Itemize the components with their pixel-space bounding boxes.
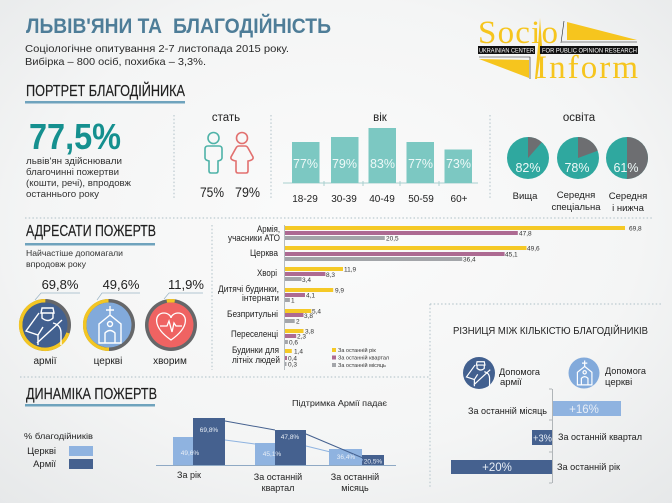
panel: age bar chart: 30-39 xyxy=(331,194,357,205)
panel: age bar chart: вік xyxy=(373,112,388,124)
bar values: 8,3 xyxy=(326,272,335,279)
title: ЛЬВІВ'ЯНИ ТА xyxy=(26,15,162,38)
title xyxy=(26,14,331,38)
bar values: 4,1 xyxy=(306,292,315,300)
recipient: army xyxy=(14,277,80,367)
bar values: 47,8 xyxy=(519,230,532,238)
dynamics legend xyxy=(24,431,94,470)
stat: 77,5%: 77,5% xyxy=(29,116,121,157)
pie: specialised xyxy=(557,137,599,179)
label: army help xyxy=(499,367,541,388)
education labels xyxy=(513,190,647,214)
dynamics legend: Армії xyxy=(33,459,56,470)
chart: dynamics columns: 45,1% xyxy=(263,451,281,458)
recipient: church: 49,6% xyxy=(103,277,140,292)
chart: donation recipients bars xyxy=(218,224,642,370)
recipients note: Найчастіше допомагали xyxy=(26,248,123,258)
heading: dynamics: ДИНАМІКА ПОЖЕРТВ xyxy=(26,386,157,403)
icon: male xyxy=(205,132,222,173)
chart: difference bars: За останній квартал xyxy=(558,432,642,443)
subtitle: Вибірка – 800 осіб, похибка – 3,3%. xyxy=(25,56,206,68)
panel: age bar chart: 77% xyxy=(408,157,433,171)
panel: education pies: освіта xyxy=(563,112,596,124)
recipient: army: армії xyxy=(34,356,57,367)
pie: specialised: 78% xyxy=(564,161,590,175)
chart: difference bars: +16% xyxy=(569,404,599,416)
education labels: і нижча xyxy=(612,203,645,214)
recipients note: впродовж року xyxy=(26,259,87,269)
category labels: Армія, xyxy=(257,224,280,235)
subtitle: Соціологічне опитування 2-7 листопада 2015 року. xyxy=(25,43,289,55)
logo: Socio Inform: Socio xyxy=(478,15,558,51)
logo: Socio Inform: Inform xyxy=(536,50,638,86)
legend: За останній місяць xyxy=(338,362,386,369)
bars: last year xyxy=(285,226,625,353)
pie: higher xyxy=(507,137,549,179)
label: church help xyxy=(605,366,647,388)
heading: recipients xyxy=(25,223,156,246)
bar values: 5,4 xyxy=(312,308,321,316)
panel: age bar chart xyxy=(283,112,478,205)
chart: dynamics columns: квартал xyxy=(262,483,294,493)
chart: dynamics columns: 47,8% xyxy=(281,434,299,441)
stat description: львів'ян здійснювали xyxy=(26,156,122,166)
chart: difference bars: +3% xyxy=(533,432,552,444)
stat description: останнього року xyxy=(26,189,100,199)
bar values: 11,9 xyxy=(344,266,357,274)
dynamics legend: Церкві xyxy=(27,446,56,457)
pie: secondary xyxy=(606,137,648,179)
bars: last quarter xyxy=(285,231,518,360)
category labels: учасники АТО xyxy=(228,233,280,244)
category labels: інтернати xyxy=(242,293,279,304)
panel: age bar chart: 83% xyxy=(370,157,395,171)
bar values xyxy=(288,226,642,368)
stat description: благочинні пожертви xyxy=(26,167,119,177)
recipient: church xyxy=(83,277,140,367)
category labels: Дитячі будинки, xyxy=(218,284,279,295)
legend xyxy=(332,347,389,369)
heading: portrait: ПОРТРЕТ БЛАГОДІЙНИКА xyxy=(26,81,185,100)
bar values: 0,4 xyxy=(288,356,297,362)
label: army help: Допомога xyxy=(499,367,541,378)
bar values: 9,9 xyxy=(335,288,344,294)
bar values: 2,3 xyxy=(297,334,306,340)
bar values: 49,6 xyxy=(527,246,540,252)
panel: gender xyxy=(200,112,260,200)
recipients note xyxy=(26,248,123,269)
title: БЛАГОДІЙНІСТЬ xyxy=(173,14,331,38)
category labels: Безпритульні xyxy=(227,309,278,320)
gender values: 75% xyxy=(200,185,224,200)
panel: age bar chart: 60+ xyxy=(451,194,468,205)
recipient: sick: 11,9% xyxy=(168,277,204,292)
recipient: sick: хворим xyxy=(153,356,187,367)
education labels: спеціальна xyxy=(551,202,601,213)
bar values: 0,6 xyxy=(289,340,298,346)
heading: recipients: АДРЕСАТИ ПОЖЕРТВ xyxy=(26,223,156,240)
education labels: Середня xyxy=(609,191,647,202)
category labels: Будинки для xyxy=(232,345,279,356)
legend: За останній квартал xyxy=(338,354,389,362)
chart: difference bars: +20% xyxy=(482,462,512,474)
subtitle xyxy=(25,43,289,68)
label: church help: церкві xyxy=(605,377,632,388)
logo: Socio Inform xyxy=(478,15,638,86)
bar values: 1 xyxy=(291,298,295,304)
gender values: 79% xyxy=(235,185,260,200)
chart: dynamics columns: 49,6% xyxy=(181,450,199,457)
gender values xyxy=(200,185,260,200)
recipient: church: церкві xyxy=(94,356,122,367)
bar values: 3,4 xyxy=(302,277,311,284)
panel: age bar chart: 79% xyxy=(332,157,357,171)
icon: female xyxy=(231,132,253,173)
chart: dynamics columns: За рік xyxy=(177,470,201,480)
category labels xyxy=(218,224,280,366)
dynamics note: Підтримка Армії падає xyxy=(292,398,388,408)
bar values: 1,4 xyxy=(294,348,303,356)
chart: dynamics columns: місяць xyxy=(341,483,369,493)
chart: dynamics columns: 20,5% xyxy=(364,458,382,466)
chart: dynamics columns: За останній xyxy=(331,472,379,482)
bar values: 36,4 xyxy=(463,256,476,264)
bar values: 45,1 xyxy=(505,252,518,258)
panel: age bar chart: 77% xyxy=(293,157,318,171)
panel: gender: стать xyxy=(212,112,240,124)
bar values: 2 xyxy=(296,318,300,326)
icon: church xyxy=(568,358,600,388)
panel: age bar chart: 50-59 xyxy=(408,194,434,205)
chart: dynamics columns: 69,8% xyxy=(200,427,218,434)
category labels: Хворі xyxy=(257,268,277,279)
pie: higher: 82% xyxy=(515,161,541,175)
panel: education pies xyxy=(507,112,648,214)
bar values: 3,8 xyxy=(305,328,314,336)
panel: age bar chart: 40-49 xyxy=(369,194,395,205)
category labels: літніх людей xyxy=(232,355,280,366)
label: army help: армії xyxy=(500,377,522,388)
bars: last month xyxy=(285,236,462,366)
chart: difference bars: За останній рік xyxy=(557,462,621,473)
panel: age bar chart: 73% xyxy=(446,157,471,171)
category labels: Переселенці xyxy=(231,329,278,340)
chart: difference bars xyxy=(451,389,642,483)
legend: За останній рік xyxy=(338,347,376,354)
category labels: Церква xyxy=(250,248,279,259)
recipient: sick xyxy=(143,277,204,367)
icon: army xyxy=(463,357,495,389)
heading: dynamics xyxy=(25,386,157,406)
label: church help: Допомога xyxy=(605,366,647,377)
dynamics legend: % благодійників xyxy=(24,431,94,441)
stat description: (кошти, речі), впродовж xyxy=(26,178,131,188)
chart: dynamics columns: За останній xyxy=(254,472,302,482)
panel: difference: РІЗНИЦЯ МІЖ КІЛЬКІСТЮ БЛАГОДІЙНИКІВ xyxy=(453,324,648,337)
logo: Socio Inform: FOR PUBLIC OPINION RESEARCH xyxy=(542,48,637,54)
logo: Socio Inform: UKRAINIAN CENTER xyxy=(479,48,535,54)
bar values: 3,8 xyxy=(304,313,313,320)
bar values: 0,3 xyxy=(288,362,297,368)
education labels: Вища xyxy=(513,191,538,202)
pie: secondary: 61% xyxy=(613,161,639,175)
bar values: 69,8 xyxy=(629,226,642,232)
chart: dynamics columns xyxy=(156,418,396,493)
panel: difference xyxy=(451,324,648,483)
bar values: 20,5 xyxy=(386,236,399,242)
education labels: Середня xyxy=(557,190,595,201)
chart: difference bars: За останній місяць xyxy=(468,406,547,417)
panel: age bar chart: 18-29 xyxy=(292,194,318,205)
chart: dynamics columns: 36,4% xyxy=(337,454,355,461)
recipient: army: 69,8% xyxy=(42,277,79,292)
stat description xyxy=(26,156,131,199)
